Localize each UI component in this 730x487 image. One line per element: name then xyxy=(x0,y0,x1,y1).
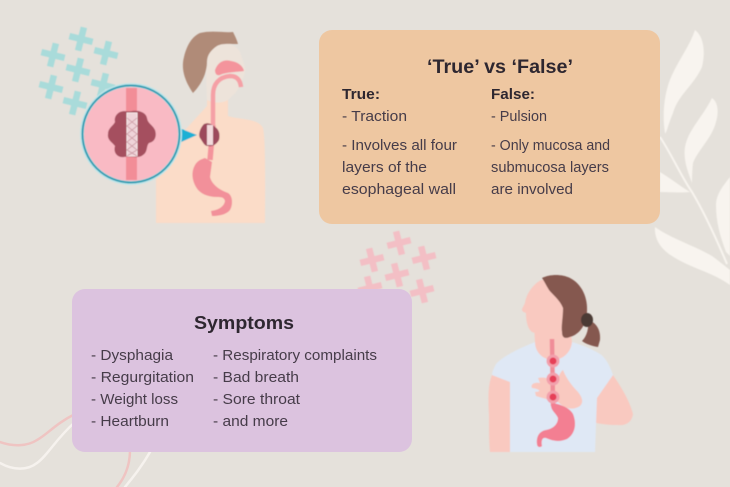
magnified stent xyxy=(127,113,137,156)
woman right arm xyxy=(590,375,633,425)
woman neck xyxy=(534,325,572,360)
heading: true vs false: ‘True’ vs ‘False’ xyxy=(427,57,573,78)
man head xyxy=(205,41,245,103)
column: true: esophageal wall xyxy=(342,182,456,198)
column: false: submucosa layers xyxy=(491,160,609,176)
symptom list right: - Bad breath xyxy=(213,370,299,386)
illustration: woman with chest discomfort xyxy=(488,275,633,452)
woman left arm xyxy=(488,375,510,452)
symptom list right xyxy=(213,348,377,430)
magnified mass xyxy=(108,111,156,157)
callout pointer xyxy=(179,128,197,143)
esophageal mass xyxy=(199,123,220,146)
pink plus pattern xyxy=(355,228,439,306)
woman esophagus xyxy=(552,339,553,406)
column: false xyxy=(491,87,610,198)
woman hair xyxy=(542,275,587,338)
symptom list right: - and more xyxy=(213,414,288,430)
symptom list left: - Weight loss xyxy=(91,392,178,408)
symptom list left: - Dysphagia xyxy=(91,348,174,364)
decorative leaf branch xyxy=(655,30,730,285)
symptom list left xyxy=(91,348,194,430)
column: false: False: xyxy=(491,87,535,103)
magnifier circle xyxy=(82,85,180,183)
man hair xyxy=(183,32,238,93)
symptom list left: - Regurgitation xyxy=(91,370,194,386)
pain marker: middle xyxy=(546,372,560,386)
symptom list right: - Sore throat xyxy=(213,392,300,408)
column: true xyxy=(342,87,457,198)
column: false: are involved xyxy=(491,182,573,198)
pain marker: lower xyxy=(546,390,560,404)
column: false: - Only mucosa and xyxy=(491,138,610,154)
man torso xyxy=(156,92,265,223)
column: true: - Involves all four xyxy=(342,138,457,154)
decorative curves xyxy=(0,414,150,487)
lower esophagus xyxy=(210,125,213,160)
column: true: - Traction xyxy=(342,109,407,125)
woman shirt xyxy=(492,342,613,452)
stomach xyxy=(192,158,232,216)
teal plus pattern xyxy=(36,24,121,118)
woman hand xyxy=(532,370,582,409)
ponytail xyxy=(582,320,600,347)
woman stomach xyxy=(537,403,575,447)
symptom list right: - Respiratory complaints xyxy=(213,348,377,364)
column: true: True: xyxy=(342,87,380,103)
pain marker: upper xyxy=(546,354,560,368)
magnified esophagus xyxy=(126,88,137,180)
column: false: - Pulsion xyxy=(491,109,547,125)
throat and esophagus xyxy=(213,76,241,125)
column: true: layers of the xyxy=(342,160,427,176)
woman face xyxy=(522,280,572,335)
heading: symptoms: Symptoms xyxy=(194,312,294,333)
hair bun xyxy=(581,313,593,327)
panel: symptoms xyxy=(72,289,412,452)
nasal cavity xyxy=(215,60,244,75)
stent xyxy=(207,125,213,145)
symptom list left: - Heartburn xyxy=(91,414,169,430)
illustration: man with esophageal diverticulum xyxy=(82,32,265,223)
panel: true vs false xyxy=(319,30,660,224)
